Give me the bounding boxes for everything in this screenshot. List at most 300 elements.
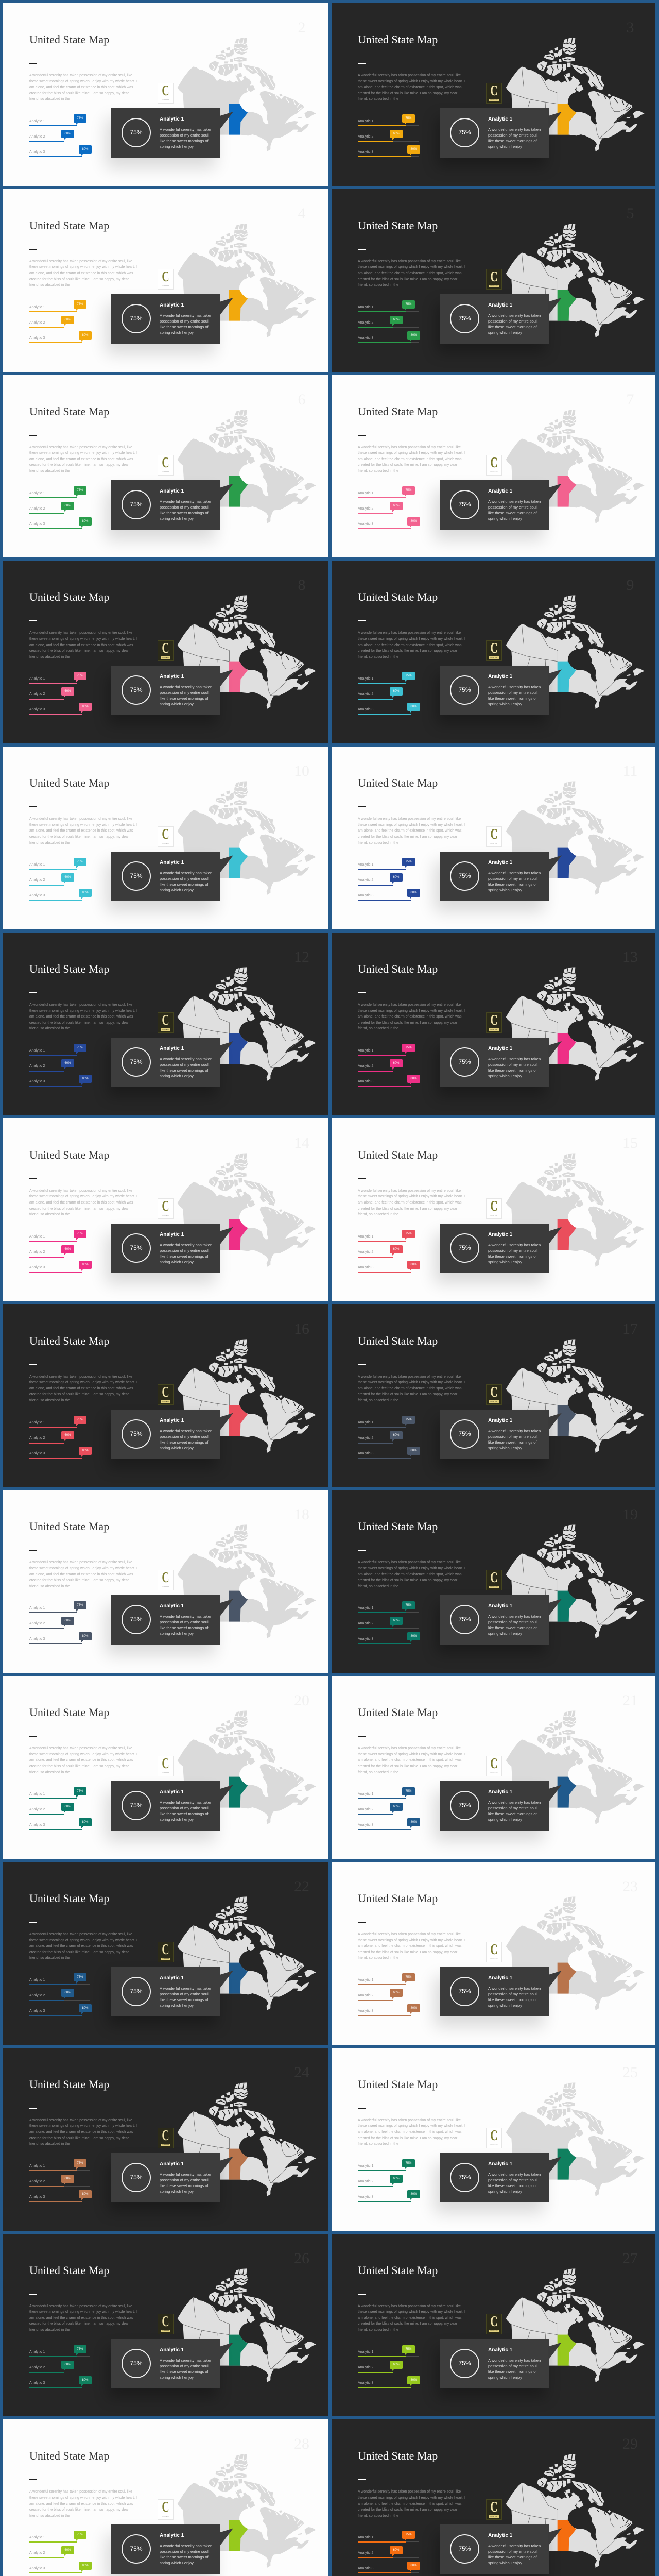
bar 3: 80% xyxy=(82,1263,89,1266)
pointer xyxy=(220,2157,233,2174)
dash xyxy=(358,1364,366,1365)
bar 2 xyxy=(358,1803,420,1815)
ring: 75% xyxy=(458,2174,471,2181)
intro text: created for the bliss of souls like mine. I am so happy, my dear xyxy=(29,835,129,839)
intro text: A wonderful serenity has taken possession of my entire soul, like xyxy=(29,1747,132,1750)
title: United State Map xyxy=(29,1892,109,1905)
ring: 75% xyxy=(458,1430,471,1437)
body: possession of my entire soul, xyxy=(488,690,538,695)
pointer xyxy=(548,1785,562,1802)
body: spring which I enjoy xyxy=(160,888,194,892)
bar 2: 60% xyxy=(393,1248,400,1251)
dash xyxy=(29,992,37,993)
bar 3: 80% xyxy=(410,705,417,708)
body: like these sweet mornings of xyxy=(488,325,537,329)
intro text xyxy=(29,1374,137,1404)
bar 3 xyxy=(29,1261,92,1273)
dash xyxy=(358,1178,366,1179)
pointer xyxy=(548,298,562,315)
bar 2: Analytic 2 xyxy=(358,507,373,511)
bars xyxy=(29,672,92,715)
bar 1: Analytic 1 xyxy=(29,120,45,123)
body: possession of my entire soul, xyxy=(488,1062,538,1067)
bar 1: Analytic 1 xyxy=(358,1421,373,1425)
page number: 14 xyxy=(294,1134,309,1151)
body: like these sweet mornings of xyxy=(160,139,209,143)
bar 3: 80% xyxy=(410,1077,417,1080)
ring: 75% xyxy=(130,2360,143,2367)
bar 3 xyxy=(29,2004,92,2016)
bar 2 xyxy=(29,130,74,142)
intro text: these sweet mornings of spring which I enjoy with my whole heart. I xyxy=(358,2496,465,2500)
intro text: A wonderful serenity has taken possession of my entire soul, like xyxy=(29,817,132,821)
intro text: these sweet mornings of spring which I enjoy with my whole heart. I xyxy=(358,451,465,455)
intro text: friend, so absorbed in the xyxy=(358,1213,398,1216)
bar 1: Analytic 1 xyxy=(29,1421,45,1425)
logo: CONTENT xyxy=(162,842,169,844)
intro text: am alone, and feel the charm of existence in this spot, which was xyxy=(358,2130,462,2134)
card xyxy=(111,1224,220,1273)
slide 10 xyxy=(0,743,328,929)
bar 2: Analytic 2 xyxy=(358,692,373,696)
body: possession of my entire soul, xyxy=(160,319,210,324)
intro text: am alone, and feel the charm of existence in this spot, which was xyxy=(29,643,133,647)
card xyxy=(440,852,549,901)
body: spring which I enjoy xyxy=(488,144,522,149)
page number: 7 xyxy=(626,391,634,408)
body: like these sweet mornings of xyxy=(488,2183,537,2188)
ring xyxy=(450,118,479,147)
intro text: A wonderful serenity has taken possession of my entire soul, like xyxy=(358,817,461,821)
bar 2 xyxy=(358,2175,420,2187)
bar 2: 60% xyxy=(64,318,71,321)
intro text: A wonderful serenity has taken possession of my entire soul, like xyxy=(358,1003,461,1007)
body: spring which I enjoy xyxy=(488,1817,522,1822)
intro text xyxy=(358,1560,465,1589)
body: spring which I enjoy xyxy=(488,2189,522,2194)
bar 2: Analytic 2 xyxy=(29,2551,45,2555)
heading: Analytic 1 xyxy=(160,1046,184,1052)
intro text: these sweet mornings of spring which I enjoy with my whole heart. I xyxy=(29,80,137,83)
slide 6 xyxy=(0,372,328,558)
pointer xyxy=(220,1041,233,1059)
bars xyxy=(358,300,420,344)
bar 3 xyxy=(29,703,92,715)
bar 1 xyxy=(358,2345,420,2358)
bars xyxy=(358,1973,420,2016)
intro text: am alone, and feel the charm of existence in this spot, which was xyxy=(358,829,462,833)
body: like these sweet mornings of xyxy=(160,1068,209,1073)
ring: 75% xyxy=(130,2174,143,2181)
intro text xyxy=(358,630,465,660)
bar 2: 60% xyxy=(393,1062,400,1065)
bar 1 xyxy=(358,1787,420,1800)
bar 1: 75% xyxy=(405,1604,412,1607)
intro text xyxy=(358,260,465,287)
logo: CONTENT xyxy=(162,2515,169,2517)
pointer xyxy=(548,1971,562,1988)
intro text: am alone, and feel the charm of existence in this spot, which was xyxy=(29,2316,133,2320)
intro text: created for the bliss of souls like mine. I am so happy, my dear xyxy=(358,1021,457,1025)
bar 3 xyxy=(358,2004,420,2016)
logo: CONTENT xyxy=(490,1400,498,1402)
page number: 11 xyxy=(623,762,637,779)
ring xyxy=(122,1791,151,1820)
logo xyxy=(486,2499,502,2520)
bar 1: Analytic 1 xyxy=(358,120,373,123)
body: A wonderful serenity has taken xyxy=(160,2358,212,2363)
intro text: A wonderful serenity has taken possession of my entire soul, like xyxy=(358,1747,461,1750)
intro text: A wonderful serenity has taken possession of my entire soul, like xyxy=(358,2490,461,2494)
pointer xyxy=(548,2528,562,2546)
map xyxy=(494,1890,659,2024)
bar 3: Analytic 3 xyxy=(358,2195,373,2199)
bar 2: 60% xyxy=(64,1434,71,1437)
pointer xyxy=(220,1227,233,1245)
bar 2: Analytic 2 xyxy=(358,1622,373,1625)
page number: 24 xyxy=(294,2064,309,2081)
body: like these sweet mornings of xyxy=(488,1254,537,1259)
intro text: A wonderful serenity has taken possession of my entire soul, like xyxy=(29,1561,132,1564)
intro text: A wonderful serenity has taken possession of my entire soul, like xyxy=(358,446,461,449)
bars xyxy=(29,486,92,530)
bar 1 xyxy=(29,1044,92,1056)
logo: CONTENT xyxy=(162,99,169,101)
card xyxy=(111,480,220,530)
card xyxy=(111,1410,220,1459)
logo xyxy=(486,1384,502,1405)
intro text: these sweet mornings of spring which I enjoy with my whole heart. I xyxy=(358,1381,465,1384)
bar 2: 60% xyxy=(64,2549,71,2552)
bar 2: 60% xyxy=(64,1619,71,1622)
heading: Analytic 1 xyxy=(160,860,184,866)
logo: CONTENT xyxy=(162,656,169,658)
ring: 75% xyxy=(458,129,471,136)
bar 1: Analytic 1 xyxy=(29,1792,45,1796)
bar 1: Analytic 1 xyxy=(29,306,45,309)
card xyxy=(440,1595,549,1645)
intro text: A wonderful serenity has taken possession of my entire soul, like xyxy=(29,1003,132,1007)
bars xyxy=(29,2531,92,2574)
intro text: these sweet mornings of spring which I enjoy with my whole heart. I xyxy=(358,2124,465,2128)
body: like these sweet mornings of xyxy=(488,696,537,701)
bar 1 xyxy=(358,1044,420,1056)
logo: CONTENT xyxy=(490,1772,498,1774)
logo xyxy=(158,2314,174,2334)
bar 1 xyxy=(29,2345,92,2358)
ring xyxy=(122,1419,151,1449)
bar 3: 80% xyxy=(82,334,89,337)
intro text: A wonderful serenity has taken possession of my entire soul, like xyxy=(29,2490,132,2494)
map xyxy=(506,38,645,151)
ring xyxy=(450,1605,479,1634)
intro text xyxy=(358,445,465,474)
logo: CONTENT xyxy=(490,2330,498,2332)
bar 2 xyxy=(29,2361,92,2373)
bar 3: 80% xyxy=(82,2564,89,2567)
body xyxy=(488,499,541,521)
intro text: A wonderful serenity has taken possession of my entire soul, like xyxy=(29,1189,132,1193)
intro text: A wonderful serenity has taken possession of my entire soul, like xyxy=(358,1375,461,1379)
intro text: A wonderful serenity has taken possession of my entire soul, like xyxy=(29,1933,132,1936)
bars xyxy=(358,858,420,901)
card xyxy=(440,1224,549,1273)
ring: 75% xyxy=(130,1244,143,1251)
intro text: created for the bliss of souls like mine. I am so happy, my dear xyxy=(358,1393,457,1396)
bar 3: Analytic 3 xyxy=(358,1266,373,1269)
card xyxy=(440,480,549,530)
body xyxy=(160,499,212,521)
bar 2: Analytic 2 xyxy=(358,2180,373,2183)
intro text: friend, so absorbed in the xyxy=(358,841,398,845)
intro text: am alone, and feel the charm of existence in this spot, which was xyxy=(29,1201,133,1205)
intro text: am alone, and feel the charm of existence in this spot, which was xyxy=(29,86,133,89)
map xyxy=(166,1890,331,2024)
bar 2: Analytic 2 xyxy=(29,1994,45,1997)
body: possession of my entire soul, xyxy=(160,133,210,138)
bar 1: Analytic 1 xyxy=(29,677,45,681)
bar 2 xyxy=(358,1617,420,1629)
bar 1 xyxy=(358,2159,420,2172)
map xyxy=(494,217,659,351)
bar 3: 80% xyxy=(82,148,89,151)
bar 1: Analytic 1 xyxy=(358,2350,373,2354)
intro text: friend, so absorbed in the xyxy=(29,841,70,845)
body: A wonderful serenity has taken xyxy=(160,1614,212,1619)
map xyxy=(494,2262,659,2396)
body: spring which I enjoy xyxy=(160,2003,194,2008)
bars xyxy=(358,486,420,530)
page number: 17 xyxy=(622,1320,638,1337)
map xyxy=(166,2447,331,2576)
body: A wonderful serenity has taken xyxy=(488,2544,541,2548)
ring xyxy=(450,2534,479,2564)
intro text: friend, so absorbed in the xyxy=(29,1771,70,1774)
bar 1: 75% xyxy=(405,1046,412,1049)
logo: CONTENT xyxy=(490,471,498,473)
logo xyxy=(158,1570,174,1590)
bars xyxy=(358,2345,420,2388)
body: possession of my entire soul, xyxy=(488,505,538,510)
dash xyxy=(29,620,37,621)
heading: Analytic 1 xyxy=(488,2533,512,2538)
bar 2: Analytic 2 xyxy=(358,1250,373,1254)
bar 1 xyxy=(29,858,92,870)
intro text: friend, so absorbed in the xyxy=(29,1027,70,1030)
slide 23 xyxy=(328,1859,659,2045)
title: United State Map xyxy=(358,33,438,46)
logo xyxy=(158,1384,174,1405)
bars xyxy=(358,1787,420,1831)
body: A wonderful serenity has taken xyxy=(488,1429,541,1433)
title: United State Map xyxy=(29,1334,109,1347)
bar 1: Analytic 1 xyxy=(358,2536,373,2539)
intro text xyxy=(29,816,137,846)
bar 1: 75% xyxy=(77,303,83,306)
intro text: am alone, and feel the charm of existence in this spot, which was xyxy=(29,1758,133,1762)
slide 12 xyxy=(0,929,328,1115)
body xyxy=(488,870,541,893)
body: spring which I enjoy xyxy=(160,702,194,706)
body xyxy=(488,313,541,335)
pointer xyxy=(548,484,562,501)
intro text: am alone, and feel the charm of existence in this spot, which was xyxy=(29,1387,133,1391)
ring xyxy=(450,1419,479,1449)
card xyxy=(111,108,220,158)
bar 3: Analytic 3 xyxy=(29,522,45,526)
bar 3: Analytic 3 xyxy=(29,336,45,340)
body: possession of my entire soul, xyxy=(160,1992,210,1996)
heading: Analytic 1 xyxy=(488,2347,512,2353)
intro text: created for the bliss of souls like mine. I am so happy, my dear xyxy=(29,92,129,95)
body: possession of my entire soul, xyxy=(160,1062,210,1067)
intro text xyxy=(358,2489,465,2519)
intro text: these sweet mornings of spring which I enjoy with my whole heart. I xyxy=(29,1381,137,1384)
body: spring which I enjoy xyxy=(160,2189,194,2194)
bar 2: Analytic 2 xyxy=(29,692,45,696)
body: A wonderful serenity has taken xyxy=(160,1800,212,1805)
ring: 75% xyxy=(130,1802,143,1809)
intro text: friend, so absorbed in the xyxy=(29,1213,70,1216)
body: like these sweet mornings of xyxy=(160,2555,209,2560)
body xyxy=(160,1056,212,1079)
body: like these sweet mornings of xyxy=(488,139,537,143)
bar 3: 80% xyxy=(410,334,417,337)
dash xyxy=(29,1736,37,1737)
bar 2: Analytic 2 xyxy=(29,1250,45,1254)
bar 3 xyxy=(358,1075,420,1087)
bar 3: Analytic 3 xyxy=(358,150,373,154)
bar 2: Analytic 2 xyxy=(29,878,45,882)
intro text: am alone, and feel the charm of existence in this spot, which was xyxy=(358,2502,462,2506)
body: spring which I enjoy xyxy=(488,888,522,892)
bar 1: Analytic 1 xyxy=(358,1978,373,1982)
bar 1: Analytic 1 xyxy=(358,2164,373,2168)
card xyxy=(440,1038,549,1087)
ring xyxy=(122,118,151,147)
ring: 75% xyxy=(458,1244,471,1251)
bar 1 xyxy=(29,1416,92,1428)
bar 3: Analytic 3 xyxy=(29,1266,45,1269)
body xyxy=(160,1614,212,1636)
bar 1 xyxy=(358,2531,420,2543)
bar 2: 60% xyxy=(64,1062,71,1065)
dash xyxy=(358,1550,366,1551)
bar 2 xyxy=(358,1059,420,1072)
bar 2: Analytic 2 xyxy=(29,2366,45,2369)
slide 29 xyxy=(328,2416,659,2576)
bar 2: 60% xyxy=(393,690,400,693)
intro text: am alone, and feel the charm of existence in this spot, which was xyxy=(29,2502,133,2506)
body xyxy=(488,1428,541,1451)
logo: CONTENT xyxy=(162,2144,169,2146)
logo: CONTENT xyxy=(162,471,169,473)
bar 1: 75% xyxy=(77,1046,83,1049)
page number: 6 xyxy=(298,391,306,408)
bar 2: Analytic 2 xyxy=(29,1436,45,1440)
intro text: friend, so absorbed in the xyxy=(29,655,70,659)
bar 2 xyxy=(29,502,92,514)
bar 3: 80% xyxy=(410,1821,417,1824)
bar 3: Analytic 3 xyxy=(358,894,373,897)
heading: Analytic 1 xyxy=(488,674,512,680)
bar 1 xyxy=(29,1787,92,1800)
logo: CONTENT xyxy=(490,1028,498,1030)
body xyxy=(488,1242,541,1265)
intro text: friend, so absorbed in the xyxy=(358,1771,398,1774)
title: United State Map xyxy=(358,776,438,789)
slide 9 xyxy=(328,557,659,743)
bar 3: 80% xyxy=(82,2007,89,2010)
logo: CONTENT xyxy=(490,1214,498,1216)
bar 2: 60% xyxy=(64,504,71,507)
body: A wonderful serenity has taken xyxy=(488,1243,541,1247)
intro text xyxy=(358,73,465,101)
dash xyxy=(29,2108,37,2109)
heading: Analytic 1 xyxy=(488,1418,512,1423)
heading: Analytic 1 xyxy=(488,860,512,866)
card xyxy=(440,294,549,344)
title: United State Map xyxy=(29,1706,109,1719)
intro text: created for the bliss of souls like mine. I am so happy, my dear xyxy=(29,1021,129,1025)
bar 1: 75% xyxy=(77,2533,83,2536)
bar 2: Analytic 2 xyxy=(358,1064,373,1068)
bar 1 xyxy=(358,114,420,127)
ring xyxy=(122,861,151,891)
bar 2: Analytic 2 xyxy=(29,321,45,325)
intro text: friend, so absorbed in the xyxy=(29,2514,70,2518)
body xyxy=(160,313,212,335)
map xyxy=(494,588,659,722)
bar 3: 80% xyxy=(410,1263,417,1266)
intro text xyxy=(29,1002,137,1032)
body: A wonderful serenity has taken xyxy=(488,685,541,689)
body: A wonderful serenity has taken xyxy=(488,1057,541,1061)
bars xyxy=(358,1230,420,1273)
bar 3: Analytic 3 xyxy=(358,1823,373,1827)
dash xyxy=(358,63,366,64)
ring xyxy=(450,2349,479,2378)
intro text: A wonderful serenity has taken possession of my entire soul, like xyxy=(358,631,461,635)
bar 1: Analytic 1 xyxy=(29,492,45,495)
intro text: am alone, and feel the charm of existence in this spot, which was xyxy=(358,272,462,275)
body: A wonderful serenity has taken xyxy=(488,1986,541,1991)
ring: 75% xyxy=(458,2545,471,2552)
pointer xyxy=(548,2343,562,2360)
ring: 75% xyxy=(458,1058,471,1065)
bar 3: 80% xyxy=(82,520,89,523)
body: spring which I enjoy xyxy=(488,2561,522,2565)
slide 3 xyxy=(328,0,659,186)
body: possession of my entire soul, xyxy=(488,1620,538,1624)
body: possession of my entire soul, xyxy=(488,319,538,324)
intro text xyxy=(29,2489,137,2519)
body: A wonderful serenity has taken xyxy=(488,1800,541,1805)
intro text: am alone, and feel the charm of existence in this spot, which was xyxy=(29,457,133,461)
body: spring which I enjoy xyxy=(160,2561,194,2565)
body: A wonderful serenity has taken xyxy=(160,127,212,132)
pointer xyxy=(220,1971,233,1988)
bar 3: 80% xyxy=(410,148,417,151)
bar 3: 80% xyxy=(82,1635,89,1638)
intro text: created for the bliss of souls like mine. I am so happy, my dear xyxy=(358,1207,457,1211)
intro text xyxy=(358,1374,465,1404)
bar 1 xyxy=(29,2531,92,2543)
intro text xyxy=(29,2117,137,2147)
ring xyxy=(122,304,151,333)
card xyxy=(440,1967,549,2016)
pointer xyxy=(548,1413,562,1431)
